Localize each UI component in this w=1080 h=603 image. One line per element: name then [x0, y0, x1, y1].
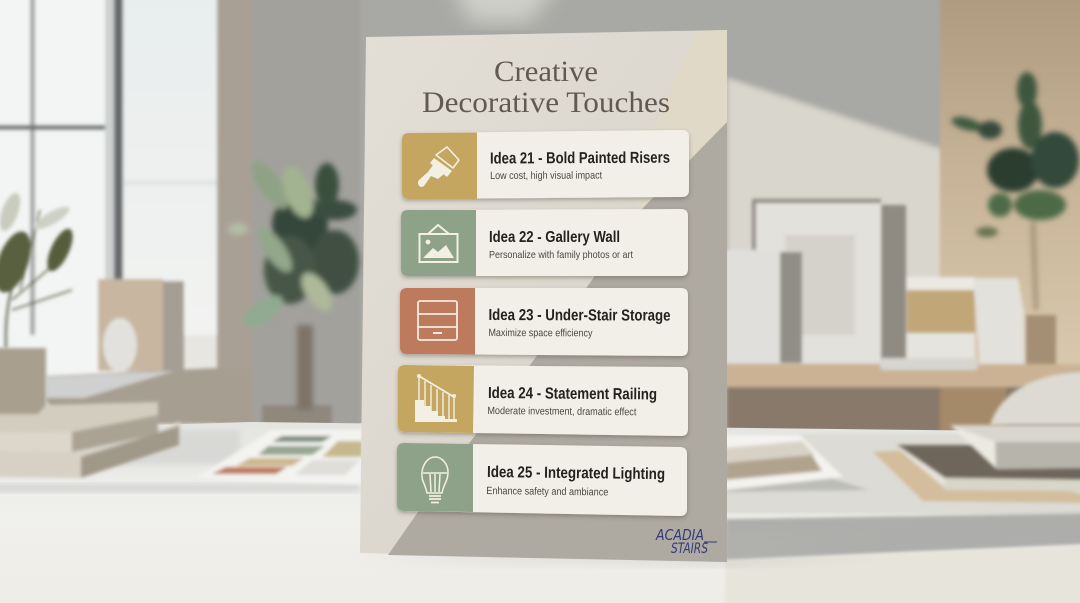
- table: [0, 422, 1080, 603]
- plant pot: [0, 348, 46, 414]
- card: Idea 25: [397, 443, 687, 516]
- logo: Acadia Stairs: ACADIA: [655, 526, 704, 544]
- wood panel: [940, 0, 1080, 367]
- card: Idea 23: [400, 288, 688, 356]
- text: Idea 24: Idea 24 - Statement Railing: [488, 385, 657, 403]
- samples, right: [725, 434, 868, 492]
- icon: paint brush: [418, 147, 459, 187]
- stacked books, left: [0, 402, 180, 478]
- icon: light bulb: [422, 457, 448, 502]
- plant, rear left: [228, 156, 359, 410]
- text: Idea 21: Low cost, high visual impact: [490, 170, 602, 182]
- window: [0, 0, 122, 395]
- wall with sunlight: [250, 0, 950, 435]
- text: Idea 25: [486, 464, 665, 499]
- text: Idea 21: Idea 21 - Bold Painted Risers: [490, 150, 670, 167]
- stacked books and folder, right: [873, 425, 1080, 503]
- card: Idea 24: [398, 365, 688, 436]
- small plant and pot: [0, 190, 78, 348]
- title: [422, 55, 670, 119]
- table shadow, left: [0, 430, 240, 465]
- icon: storage drawers: [418, 301, 457, 340]
- window sill: [46, 368, 253, 424]
- table front edge, right: [725, 434, 1080, 514]
- title: Decorative Touches: [422, 86, 670, 119]
- text: Idea 23: [488, 307, 671, 340]
- board shadow: [360, 530, 900, 562]
- paint swatch card: [196, 430, 362, 484]
- card: Idea 21: [402, 130, 689, 199]
- chair: [990, 372, 1080, 425]
- text: Idea 25: Enhance safety and ambiance: [486, 485, 609, 498]
- text: Idea 25: Idea 25 - Integrated Lighting: [487, 464, 665, 483]
- text: Idea 22: Idea 22 - Gallery Wall: [489, 229, 620, 246]
- icon: framed picture: [420, 225, 458, 262]
- shelf with frames: [725, 199, 1080, 432]
- plant, right: [950, 72, 1079, 310]
- text: Idea 22: Personalize with family photos or art: [489, 249, 633, 261]
- text: Idea 24: Moderate investment, dramatic effect: [487, 405, 636, 418]
- card: Idea 22: [401, 209, 688, 276]
- text: Idea 23: Maximize space efficiency: [488, 327, 593, 339]
- text: Idea 21: [490, 150, 670, 182]
- text: Idea 22: [489, 229, 633, 261]
- icon: staircase railing: [415, 374, 457, 422]
- logo: Acadia Stairs: [655, 526, 717, 557]
- logo: Acadia Stairs: STAIRS: [671, 541, 708, 557]
- panel: poster board: [360, 30, 727, 562]
- text: Idea 23: Idea 23 - Under-Stair Storage: [488, 307, 671, 325]
- text: Idea 24: [487, 385, 657, 418]
- title: Creative: [494, 55, 598, 88]
